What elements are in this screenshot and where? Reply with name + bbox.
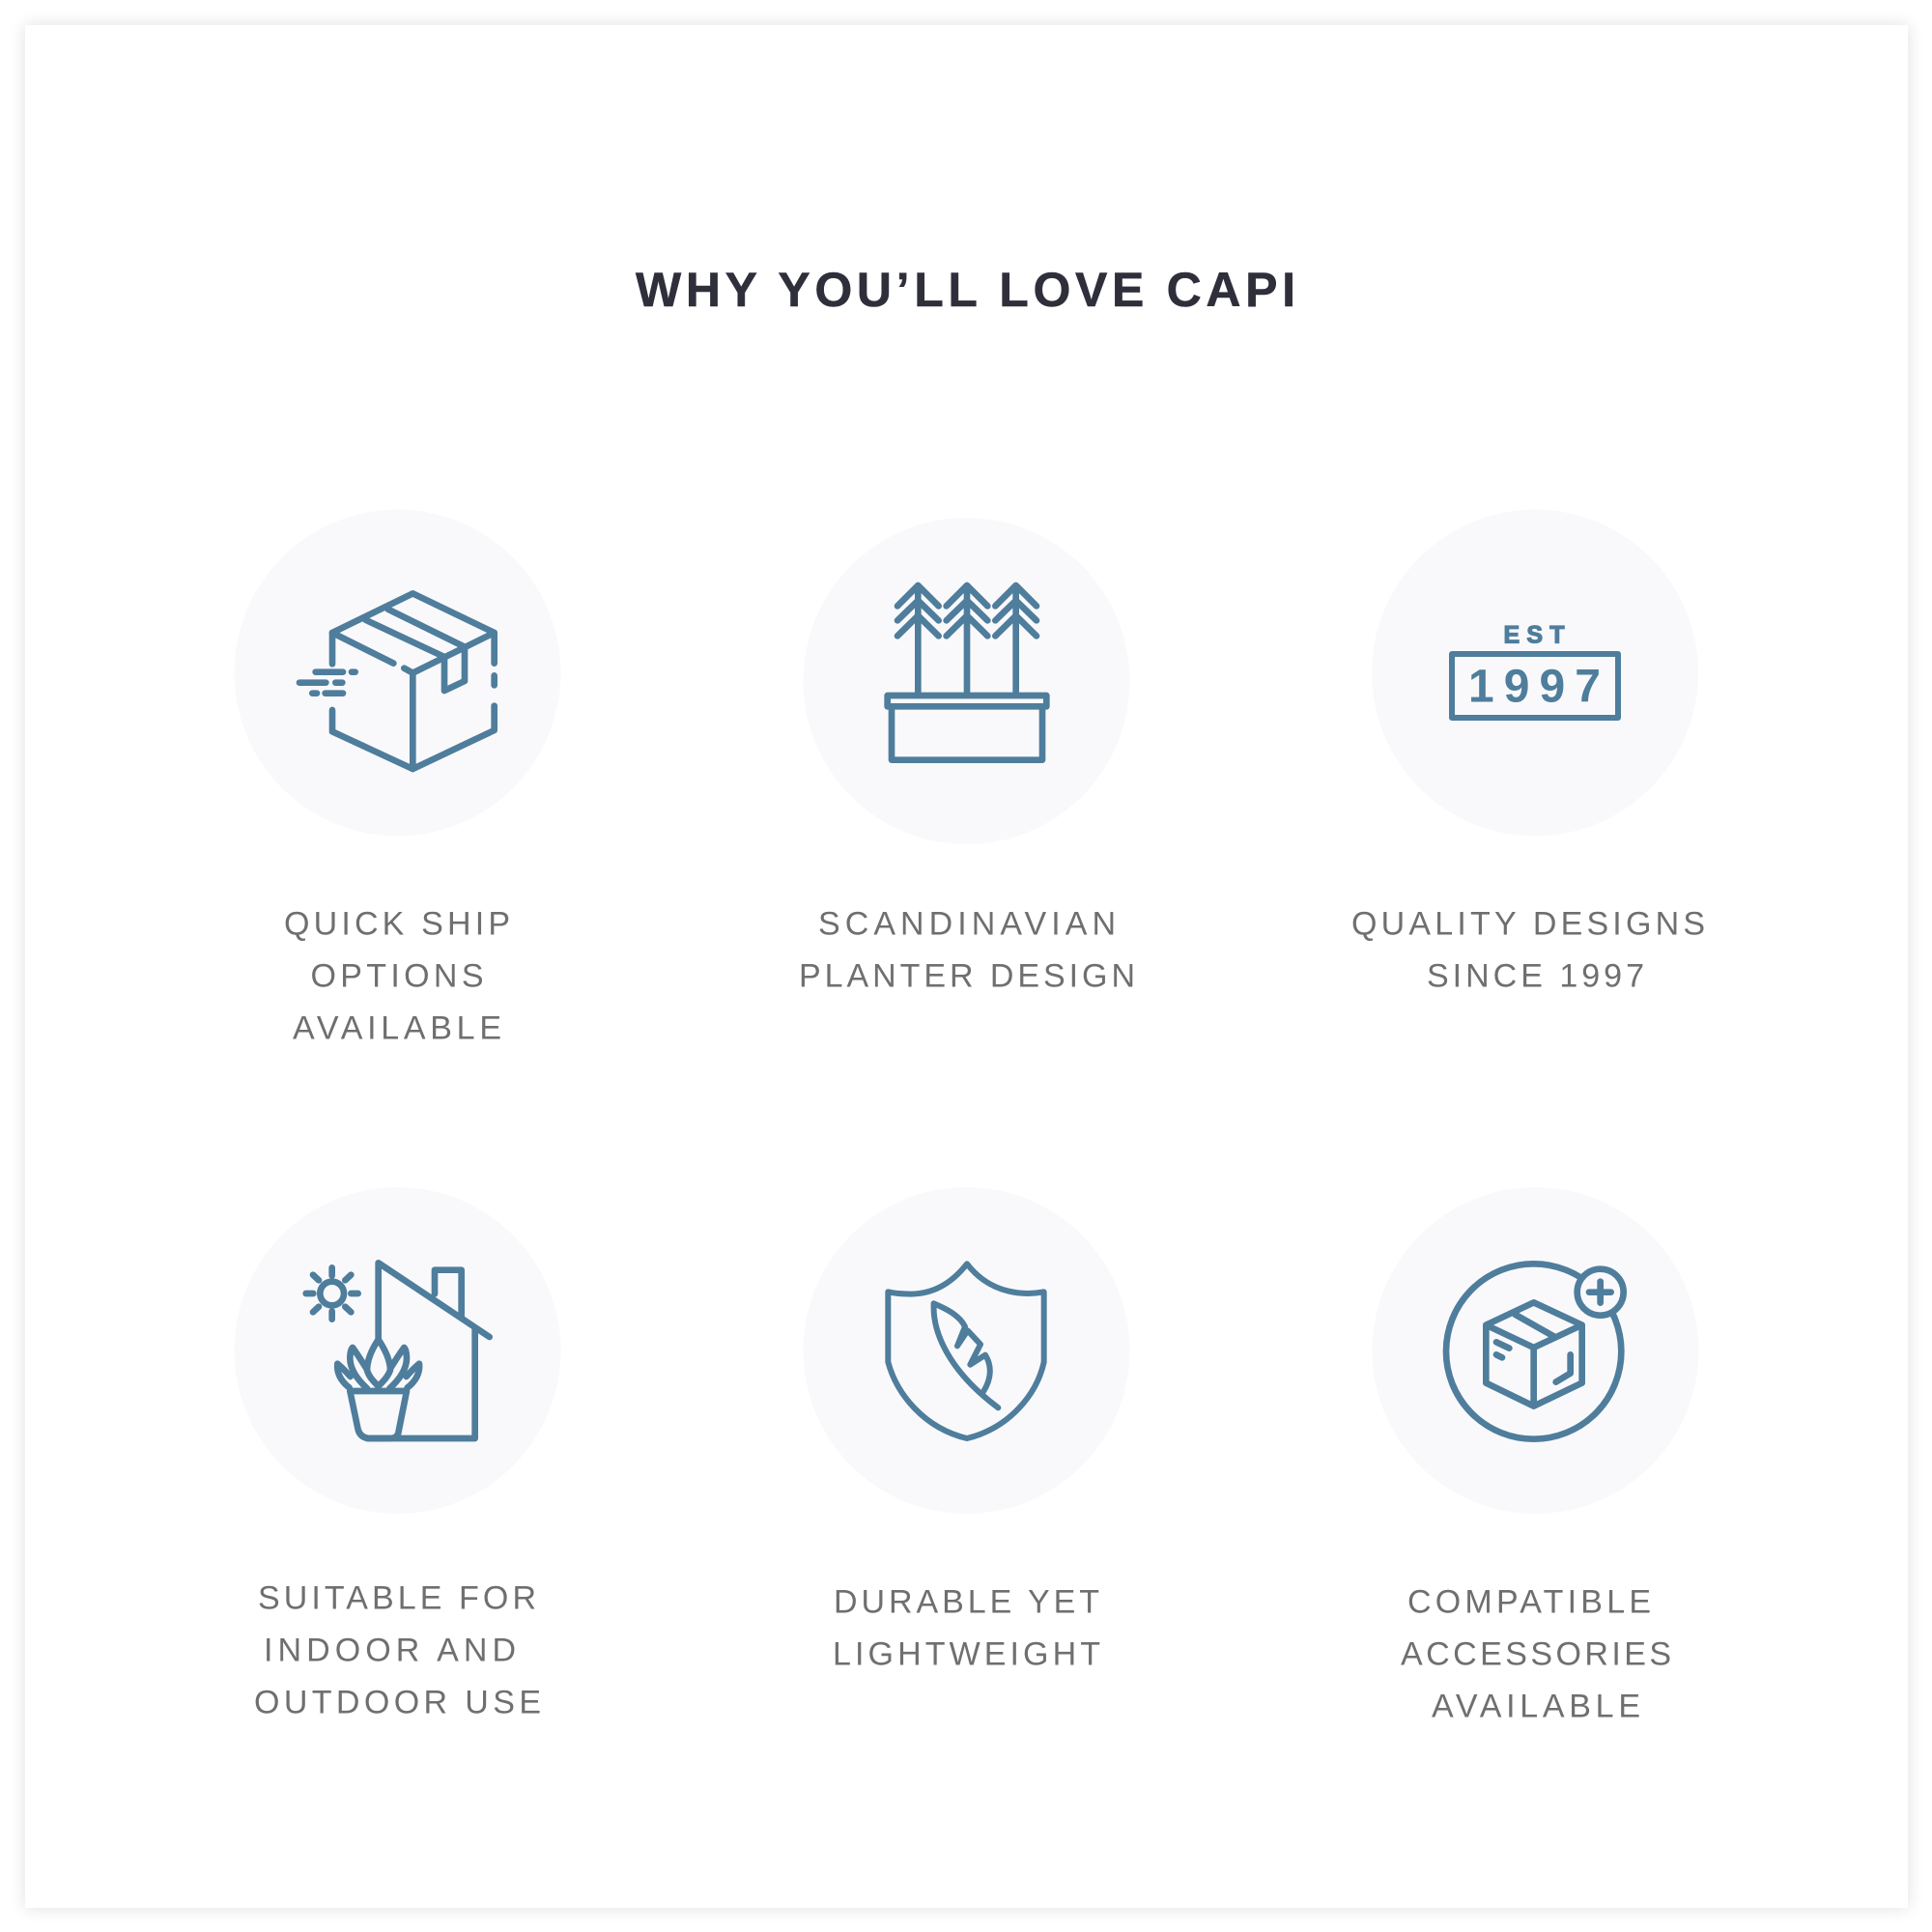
icon circle: scandinavian design [804, 518, 1130, 844]
label: quick ship [284, 906, 510, 1047]
label: compatible accessories: COMPATIBLE [1407, 1584, 1651, 1621]
icon: est 1997 badge: EST [1503, 622, 1565, 649]
label: durable lightweight: LIGHTWEIGHT [833, 1636, 1100, 1673]
panel: quality designs [1351, 510, 1705, 995]
panel: quick ship [234, 510, 560, 1047]
icon: shield with feather [888, 1264, 1044, 1438]
label: compatible accessories: ACCESSORIES [1401, 1636, 1671, 1673]
icon: est 1997 badge: 1997 [1468, 662, 1601, 713]
label: indoor outdoor: INDOOR AND [264, 1633, 516, 1669]
panel: scandinavian design [799, 518, 1135, 995]
label: durable lightweight [833, 1584, 1100, 1673]
label: compatible accessories [1401, 1584, 1671, 1725]
label: indoor outdoor [254, 1580, 541, 1721]
icon: trees in planter [888, 585, 1046, 760]
panel: durable lightweight [804, 1187, 1130, 1673]
icon circle: compatible accessories [1372, 1187, 1698, 1514]
icon circle: quick ship [234, 510, 560, 837]
icon circle: durable lightweight [804, 1187, 1130, 1514]
label: quality designs: QUALITY DESIGNS [1351, 906, 1705, 943]
label: scandinavian design: SCANDINAVIAN [818, 906, 1116, 943]
title: WHY YOU’LL LOVE CAPI [636, 263, 1295, 317]
label: indoor outdoor: SUITABLE FOR [258, 1580, 536, 1617]
icon circle: quality designs [1372, 510, 1698, 837]
label: scandinavian design [799, 906, 1135, 995]
label: quality designs [1351, 906, 1705, 995]
label: quick ship: AVAILABLE [293, 1010, 501, 1047]
icon: est 1997 badge [1452, 622, 1618, 718]
label: quick ship: OPTIONS [311, 958, 483, 995]
label: compatible accessories: AVAILABLE [1432, 1689, 1640, 1725]
label: scandinavian design: PLANTER DESIGN [799, 958, 1135, 995]
icon circle: indoor outdoor [234, 1187, 560, 1514]
panel: indoor outdoor [234, 1187, 560, 1721]
label: quality designs: SINCE 1997 [1427, 958, 1644, 995]
icon: house, sun and plant [306, 1263, 490, 1438]
icon: box with plus [1446, 1264, 1624, 1439]
icon: shipping box [299, 593, 495, 769]
panel: compatible accessories [1372, 1187, 1698, 1725]
label: durable lightweight: DURABLE YET [834, 1584, 1099, 1621]
label: quick ship: QUICK SHIP [284, 906, 510, 943]
label: indoor outdoor: OUTDOOR USE [254, 1685, 541, 1721]
